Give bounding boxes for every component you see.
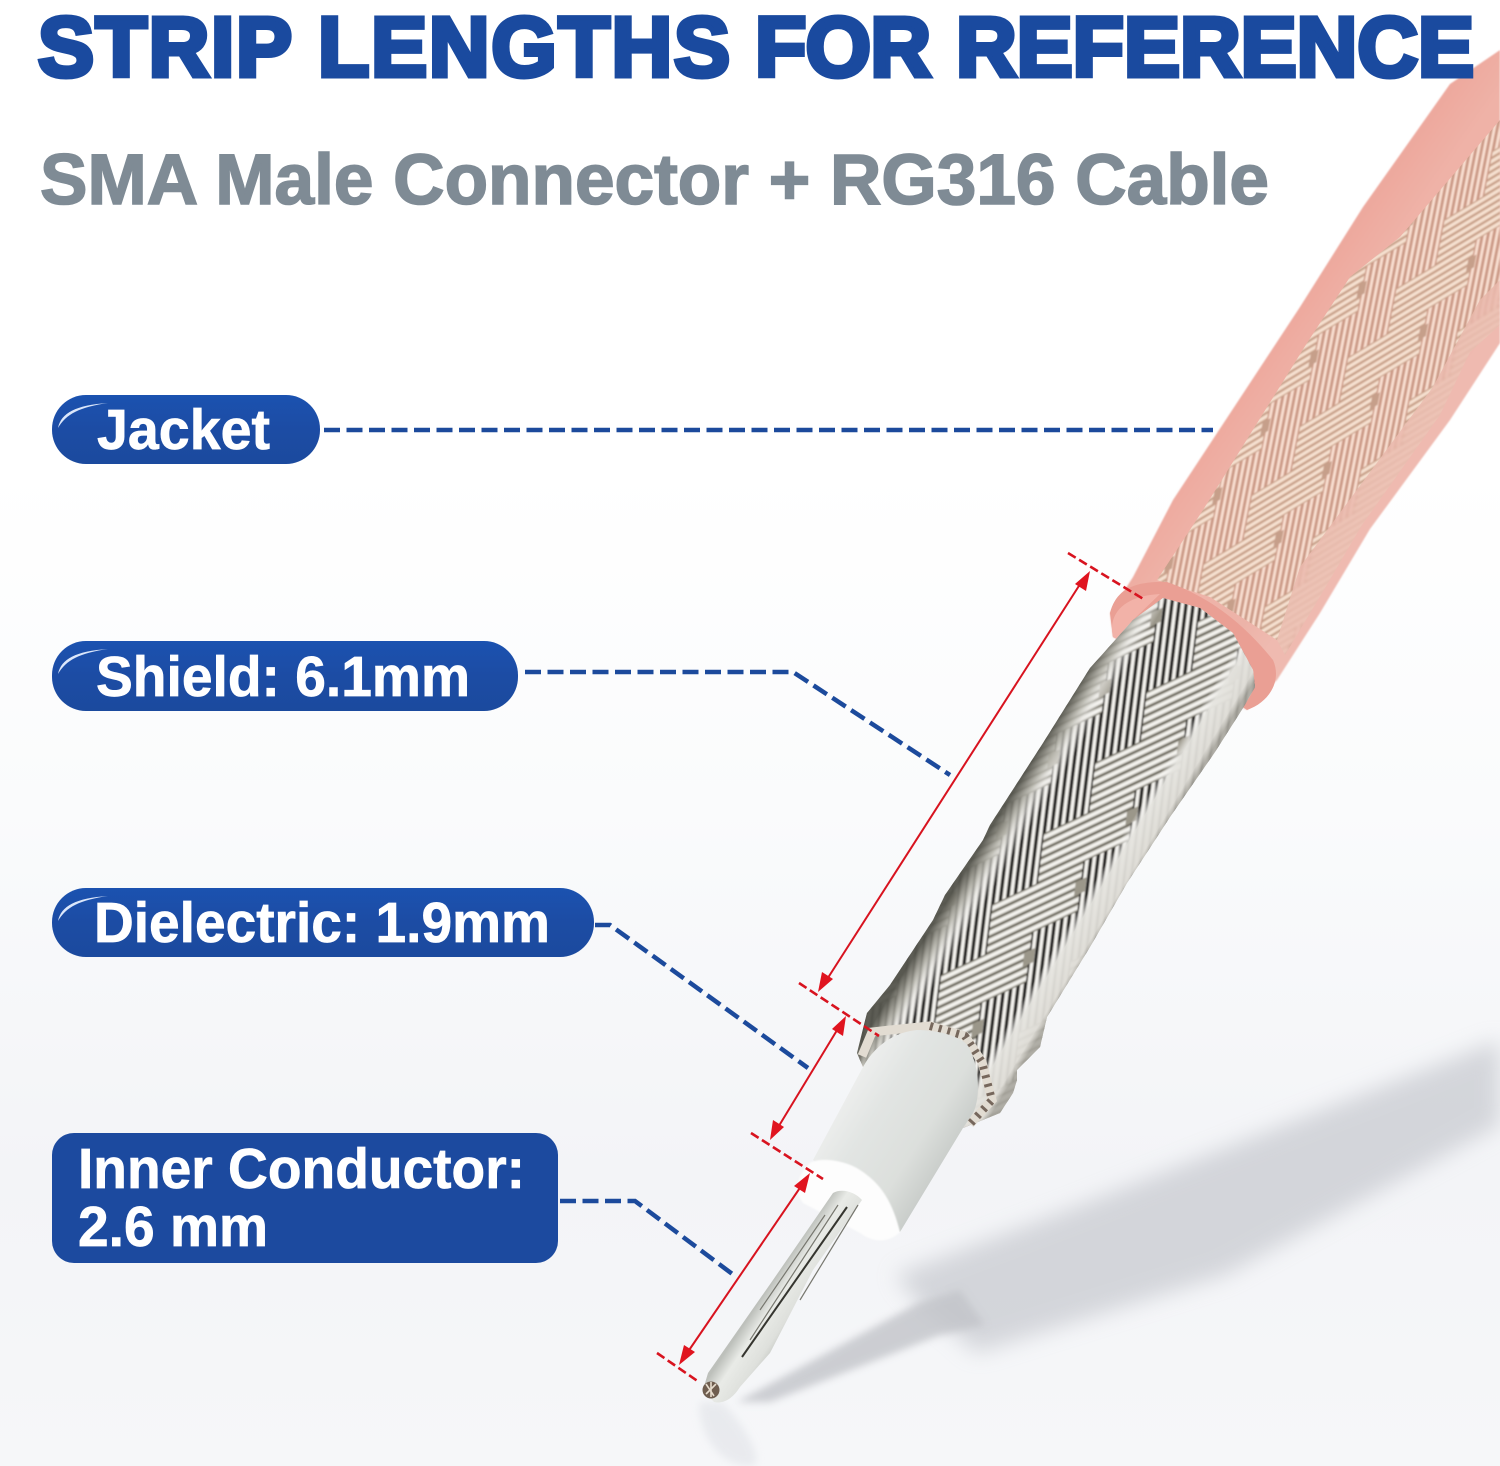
dimension: inner conductor length — [657, 1173, 810, 1382]
label: jacket: Jacket — [97, 398, 270, 462]
label: inner conductor — [52, 1133, 558, 1263]
title: LENGTHS — [318, 0, 730, 94]
callout line: jacket — [324, 428, 1213, 432]
jacket inner lip — [1112, 594, 1160, 640]
callout line: dielectric — [595, 925, 808, 1068]
shield braid — [857, 598, 1255, 1128]
dimension: dielectric length — [751, 1016, 846, 1179]
label: jacket — [52, 395, 320, 464]
label: shield: Shield: 6.1mm — [96, 645, 470, 709]
dimension: shield length — [799, 553, 1145, 1036]
title: STRIP — [38, 0, 292, 94]
jacket — [1110, 50, 1500, 710]
label: dielectric: Dielectric: 1.9mm — [94, 891, 550, 955]
cable cast shadow — [699, 1040, 1500, 1466]
jacket cut ring — [1110, 582, 1276, 710]
frayed shield end — [862, 1026, 992, 1124]
subtitle: SMA Male Connector + RG316 Cable — [40, 141, 1269, 220]
title: FOR — [755, 0, 931, 94]
coaxial cable illustration — [702, 50, 1500, 1402]
inner conductor — [702, 1191, 862, 1402]
title — [38, 0, 1474, 94]
title: REFERENCE — [956, 0, 1474, 94]
label: inner conductor: 2.6 mm — [78, 1195, 268, 1259]
label: inner conductor: Inner Conductor: — [78, 1137, 525, 1201]
dielectric — [798, 1030, 978, 1240]
callout line: shield — [525, 672, 950, 775]
callout line: inner conductor — [560, 1201, 735, 1276]
